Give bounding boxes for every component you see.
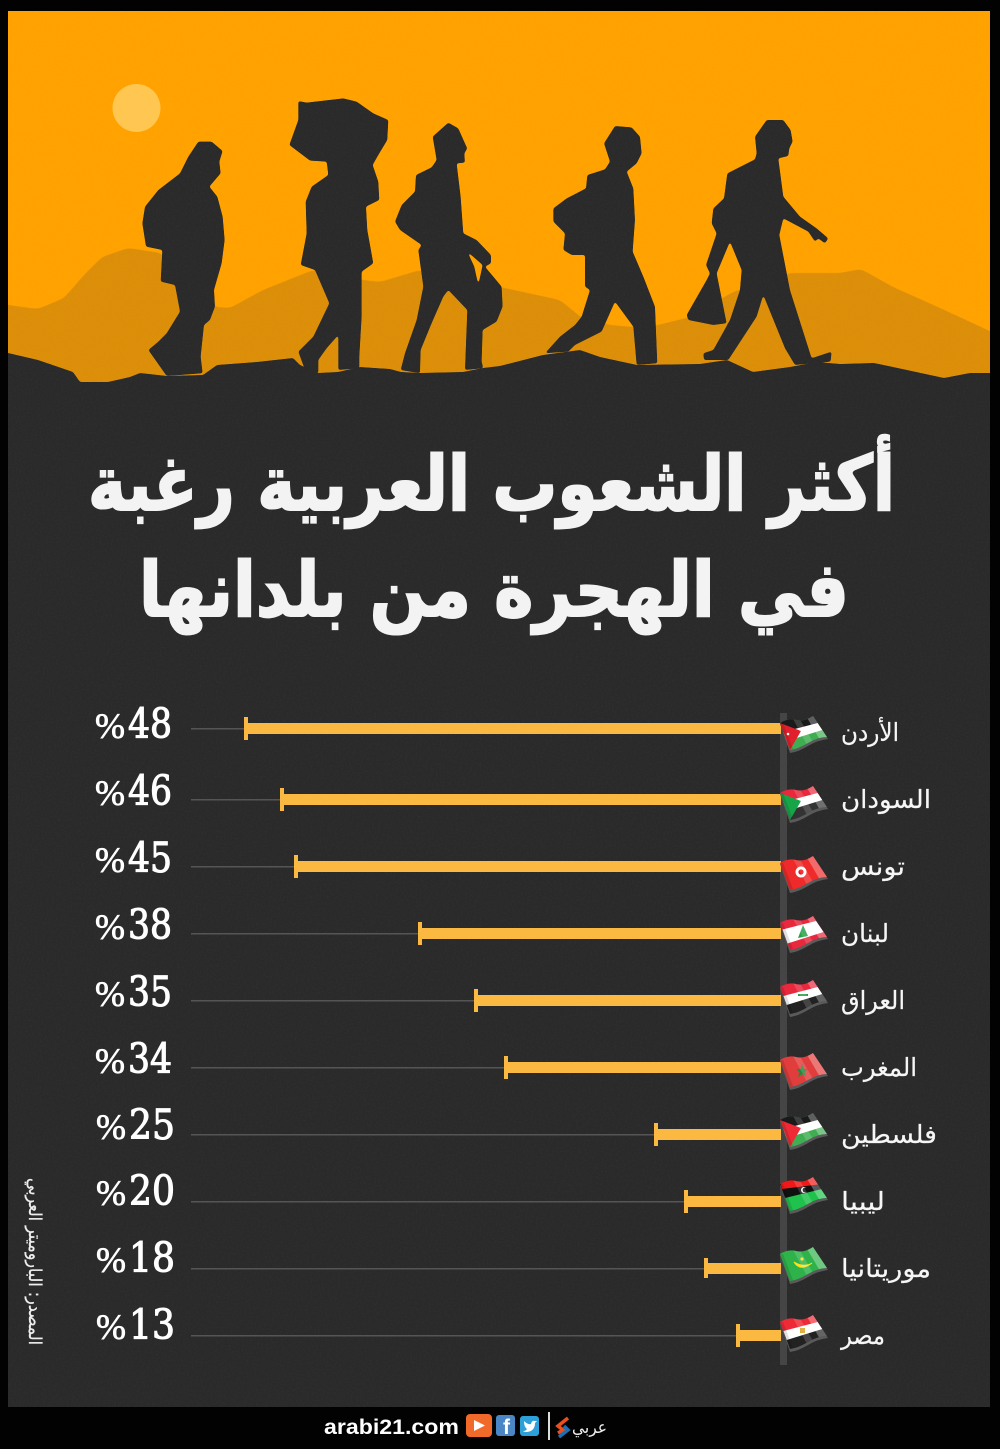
title	[88, 434, 895, 635]
row: Morocco 34: %	[95, 1041, 125, 1081]
icon: facebook: f	[503, 1416, 511, 1439]
row: Libya 20	[96, 1174, 882, 1214]
row: Egypt 13: %	[96, 1307, 126, 1347]
row: Libya 20: %	[96, 1173, 126, 1213]
icon: twitter	[520, 1416, 539, 1436]
row: Egypt 13	[96, 1308, 884, 1352]
row: Sudan 46: %	[95, 773, 125, 813]
panel: orange sky scene	[0, 11, 1000, 420]
row: Tunisia 45: تونس	[841, 852, 905, 881]
row: Morocco 34: 34	[128, 1035, 172, 1083]
silhouette: person 5 with handbag	[687, 120, 832, 365]
silhouette: person 1	[142, 142, 225, 376]
row: Egypt 13: مصر	[839, 1321, 885, 1350]
source note: المصدر: الباروميتر العربي	[24, 1178, 45, 1345]
row: Jordan 48	[96, 706, 897, 753]
row: Tunisia 45: %	[95, 840, 125, 880]
mountains	[8, 248, 990, 382]
row: Lebanon 38	[96, 908, 887, 953]
row: Lebanon 38: لبنان	[841, 919, 889, 948]
row: Iraq 35: 35	[128, 968, 172, 1016]
icon: facebook	[496, 1415, 515, 1439]
row: Palestine 25: 25	[129, 1101, 175, 1149]
footer	[324, 1412, 607, 1440]
row: Lebanon 38: %	[95, 907, 125, 947]
row: Tunisia 45: 45	[128, 834, 172, 882]
row: Morocco 34: المغرب	[841, 1053, 917, 1082]
row: Jordan 48: %	[95, 706, 125, 746]
row: Palestine 25	[96, 1108, 936, 1150]
silhouette: person 3 with bag	[395, 123, 503, 373]
title: في الهجرة من بلدانها	[139, 545, 849, 635]
chart axis	[780, 713, 787, 1365]
logo: arabi21	[558, 1418, 607, 1438]
silhouette: person 2 with bundle	[289, 98, 388, 373]
row: Iraq 35: العراق	[841, 986, 905, 1015]
icon: sun	[112, 84, 160, 132]
icon: youtube	[466, 1414, 492, 1437]
row: Sudan 46	[96, 774, 929, 823]
row: Lebanon 38: 38	[128, 901, 172, 949]
silhouette: person 4 with backpack	[545, 126, 657, 365]
row: Morocco 34	[96, 1042, 915, 1090]
row: Libya 20: ليبيا	[841, 1187, 885, 1216]
website url: arabi21.com	[324, 1416, 459, 1439]
logo: arabi21: عربي	[572, 1418, 607, 1438]
row: Sudan 46: السودان	[841, 785, 931, 814]
row: Iraq 35: %	[95, 974, 125, 1014]
row: Sudan 46: 46	[128, 767, 172, 815]
row: Jordan 48: الأردن	[841, 716, 899, 747]
row: Mauritania 18: 18	[129, 1234, 175, 1282]
ground	[8, 350, 990, 396]
bar chart	[95, 700, 937, 1365]
row: Libya 20: 20	[129, 1167, 175, 1215]
row: Mauritania 18: %	[96, 1240, 126, 1280]
row: Egypt 13: 13	[129, 1301, 175, 1349]
row: Tunisia 45	[96, 840, 904, 893]
row: Palestine 25: %	[96, 1107, 126, 1147]
row: Mauritania 18	[96, 1240, 929, 1284]
panel: dark chalkboard	[8, 396, 990, 1407]
row: Mauritania 18: موريتانيا	[841, 1254, 931, 1283]
row: Palestine 25: فلسطين	[841, 1120, 937, 1149]
row: Jordan 48: 48	[128, 700, 172, 748]
row: Iraq 35	[96, 974, 903, 1017]
